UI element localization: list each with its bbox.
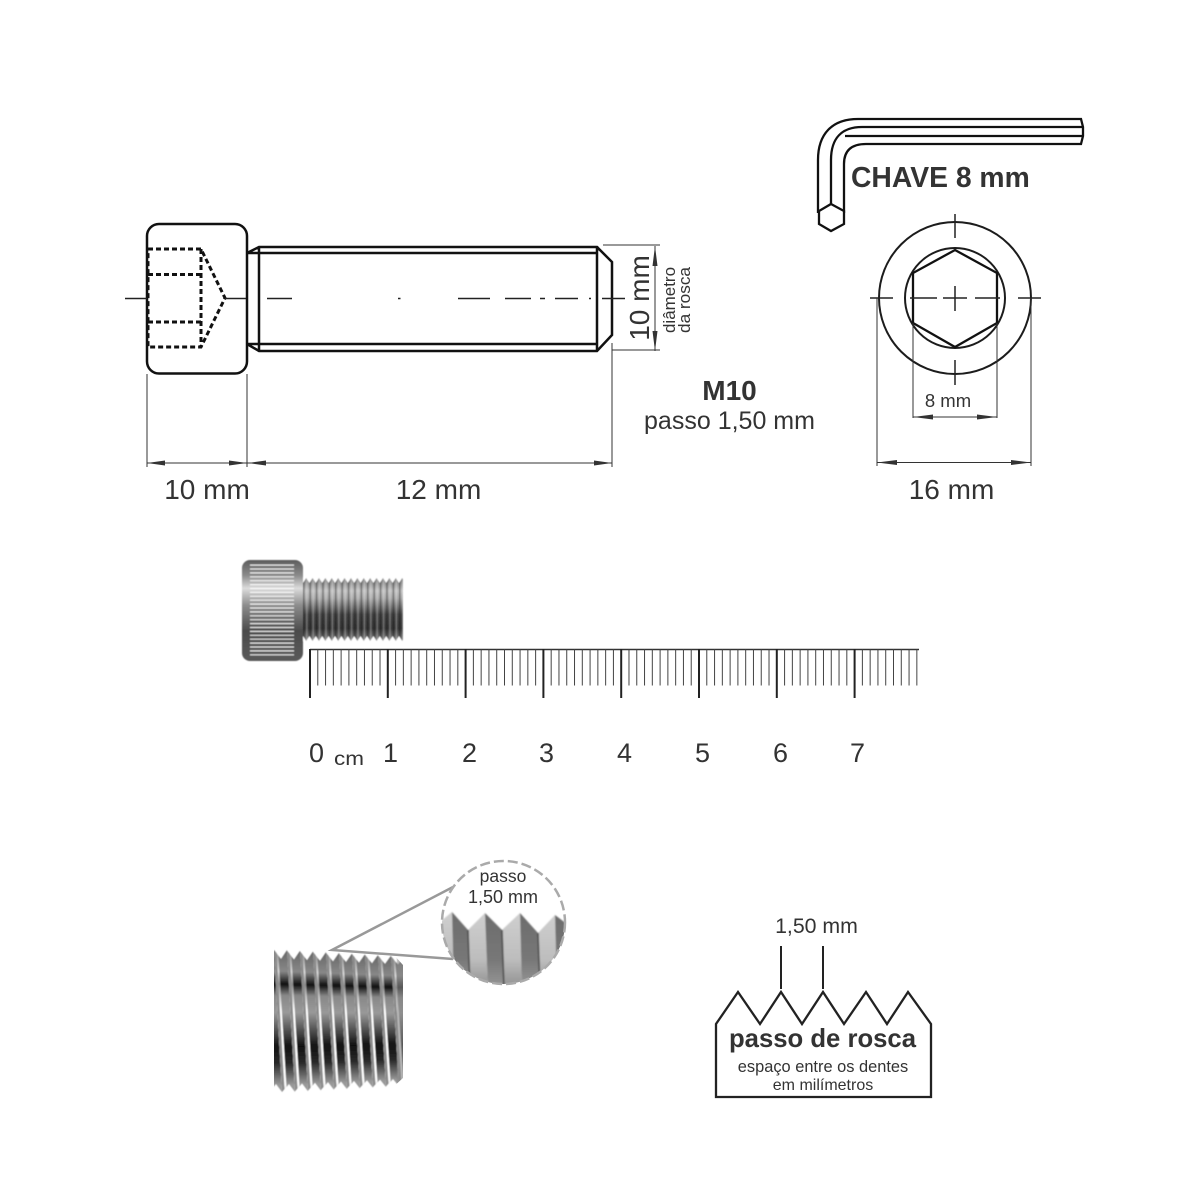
thread spec label	[644, 375, 815, 435]
ruler labels: 6	[773, 738, 788, 768]
dimension: head length: 12 mm	[396, 474, 481, 505]
dimension: head length: 10 mm	[164, 474, 250, 505]
thread spec label: passo 1,50 mm	[644, 407, 815, 435]
panel: hex key	[818, 119, 1083, 231]
ruler labels: 0	[309, 738, 324, 768]
ruler labels: 3	[539, 738, 554, 768]
screw head outline	[147, 224, 247, 374]
tooth profile outline	[716, 992, 931, 1097]
ruler labels: 1	[383, 738, 398, 768]
icon: thread photo	[274, 950, 403, 1092]
ruler labels: 4	[617, 738, 632, 768]
thread spec label: M10	[702, 375, 757, 406]
pitch value label: 1,50 mm	[775, 914, 858, 938]
pitch description: espaço entre os dentes	[738, 1058, 908, 1076]
panel: screw side view technical drawing	[125, 224, 815, 505]
magnifier lens: passo	[480, 866, 526, 886]
infographic: M10 screw specifications	[125, 118, 1084, 1098]
panel: thread pitch diagram	[716, 914, 931, 1097]
ruler labels: 2	[462, 738, 477, 768]
ruler labels: 7	[850, 738, 865, 768]
dimension: thread diameter: da rosca	[675, 266, 694, 333]
magnifier lens: 1,50 mm	[468, 887, 538, 907]
panel: screw scale with ruler	[242, 560, 919, 770]
dimension: 16 mm head diameter	[877, 298, 1031, 505]
hidden hex socket, dashed	[148, 249, 225, 347]
threaded shank outline	[247, 246, 612, 351]
dimension: 8 mm across flats	[913, 323, 997, 420]
ruler labels: 5	[695, 738, 710, 768]
hex socket	[913, 250, 997, 347]
pitch description	[738, 1058, 908, 1094]
panel: thread close-up with magnifier	[261, 861, 575, 1092]
centre lines	[870, 214, 1041, 385]
dimension: thread diameter: 10 mm	[624, 255, 655, 341]
pitch description: em milímetros	[773, 1077, 873, 1094]
ruler labels	[309, 738, 865, 770]
key size label: CHAVE 8 mm	[851, 161, 1030, 193]
pitch marker lines	[781, 946, 823, 989]
ruler ticks	[310, 649, 919, 698]
icon: L-shaped hex key	[818, 119, 1083, 213]
magnifier lens	[440, 860, 566, 986]
socket circle	[905, 248, 1005, 348]
dimension: 8 mm across flats: 8 mm	[925, 390, 971, 411]
dimension: 16 mm head diameter: 16 mm	[909, 474, 994, 505]
panel: screw head top view	[870, 214, 1041, 505]
magnifier leader lines	[332, 887, 453, 959]
centre line	[125, 298, 625, 300]
ruler labels: cm	[334, 749, 364, 770]
outer head circle	[879, 222, 1031, 374]
dimension: thread diameter	[603, 245, 694, 351]
dimension: thread diameter: diâmetro	[660, 267, 679, 333]
pitch heading: passo de rosca	[729, 1025, 917, 1053]
icon: knurled screw photo	[242, 560, 403, 661]
dimension: head length	[147, 343, 612, 505]
